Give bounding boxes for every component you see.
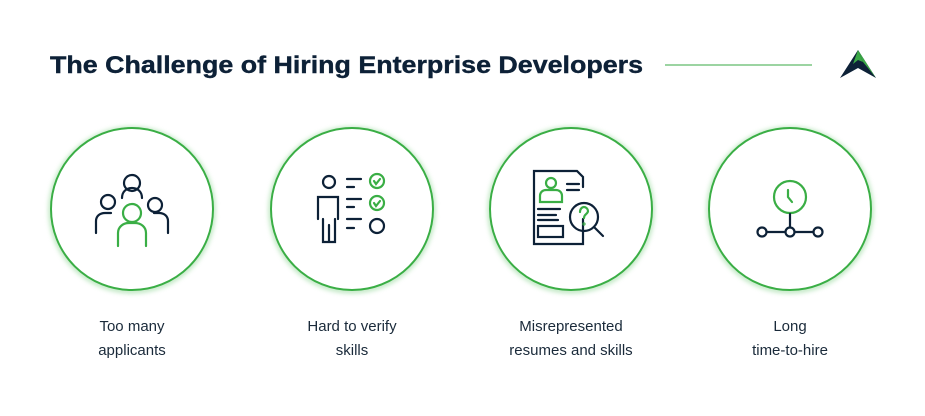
- panel: long time-to-hire: [709, 128, 871, 359]
- panel: misrepresented: [490, 128, 652, 359]
- label: Misrepresented: [519, 318, 623, 335]
- label: skills: [336, 342, 368, 359]
- icon: resume magnifier: [534, 171, 603, 244]
- label: applicants: [98, 342, 166, 359]
- panel: hard to verify: [271, 128, 433, 359]
- title: The Challenge of Hiring Enterprise Developers: [50, 52, 643, 79]
- label: Long: [773, 318, 807, 335]
- icon: clock timeline: [758, 181, 822, 236]
- label: Hard to verify: [307, 318, 397, 335]
- icon: people: [96, 175, 168, 246]
- label: resumes and skills: [509, 342, 633, 359]
- label: time-to-hire: [752, 342, 828, 359]
- icon: checklist: [318, 174, 384, 242]
- panel: too many applicants: [51, 128, 213, 359]
- icon: logo: [840, 50, 876, 78]
- label: Too many: [99, 318, 165, 335]
